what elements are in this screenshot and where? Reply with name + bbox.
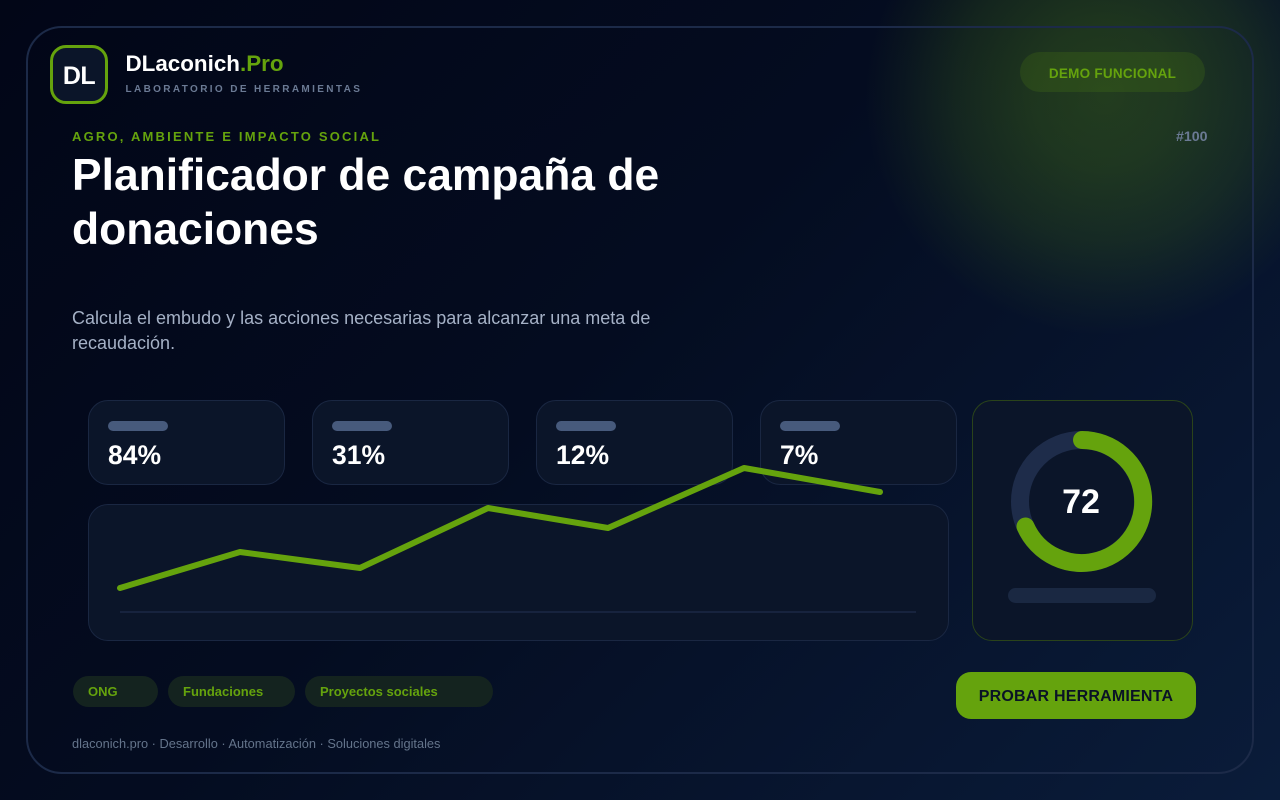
score panel	[972, 400, 1192, 640]
donut gauge	[1011, 431, 1152, 572]
stat card: 84%	[88, 400, 284, 484]
description: recaudación.	[72, 333, 175, 353]
line chart panel	[88, 504, 948, 640]
stat card: 31%: 31%	[332, 440, 385, 470]
title	[72, 151, 659, 254]
description	[72, 308, 650, 353]
category eyebrow: AGRO, AMBIENTE E IMPACTO SOCIAL	[72, 129, 381, 144]
call to action button: PROBAR HERRAMIENTA	[979, 688, 1173, 705]
tag: ONG	[73, 676, 158, 707]
background glow	[865, 0, 1280, 335]
logo badge	[50, 45, 108, 104]
description: Calcula el embudo y las acciones necesarias para alcanzar una meta de	[72, 308, 650, 328]
stat card: 12%	[536, 400, 732, 484]
title: Planificador de campaña de	[72, 151, 659, 200]
tag: Fundaciones	[168, 676, 295, 707]
stat card: 7%: 7%	[780, 440, 818, 470]
gauge value: 72	[1062, 483, 1100, 521]
gauge label bar	[1008, 588, 1156, 603]
demo badge: DEMO FUNCIONAL	[1049, 66, 1176, 81]
tag: ONG: ONG	[88, 684, 118, 699]
brand name: DLaconich.Pro	[126, 51, 284, 76]
title: donaciones	[72, 205, 319, 254]
tool number: #100	[1176, 129, 1208, 145]
call to action button	[956, 672, 1196, 719]
stat card: 84%: 84%	[108, 440, 161, 470]
demo badge	[1020, 52, 1205, 92]
tag: Fundaciones: Fundaciones	[183, 684, 263, 699]
footer: dlaconich.pro · Desarrollo · Automatización · Soluciones digitales	[72, 736, 440, 751]
stat card: 7%	[760, 400, 956, 484]
tag: Proyectos sociales	[305, 676, 493, 707]
stat card: 12%: 12%	[556, 440, 609, 470]
stat card: 31%	[312, 400, 508, 484]
brand subtitle: LABORATORIO DE HERRAMIENTAS	[126, 84, 362, 95]
tag: Proyectos sociales: Proyectos sociales	[320, 684, 438, 699]
logo badge: DL	[63, 62, 95, 90]
